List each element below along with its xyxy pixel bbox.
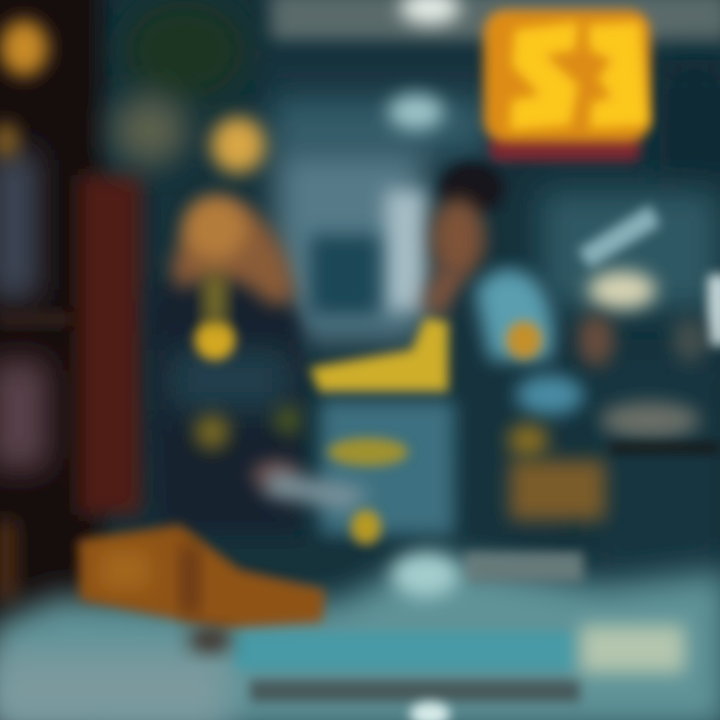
person: left figure — [150, 196, 305, 530]
brown parcel — [78, 525, 325, 652]
foliage — [123, 0, 247, 100]
table surface — [0, 552, 720, 720]
left bookshelf — [0, 0, 100, 720]
pale wall patch — [112, 94, 188, 166]
right side highlights — [578, 205, 720, 454]
yellow document and desk panel — [265, 318, 455, 544]
person: right figure — [420, 162, 605, 540]
sign: yellow S3 board — [484, 10, 650, 161]
icon: yellow lamp — [211, 117, 265, 173]
ceiling lights — [388, 0, 460, 130]
red wood column — [78, 175, 142, 515]
